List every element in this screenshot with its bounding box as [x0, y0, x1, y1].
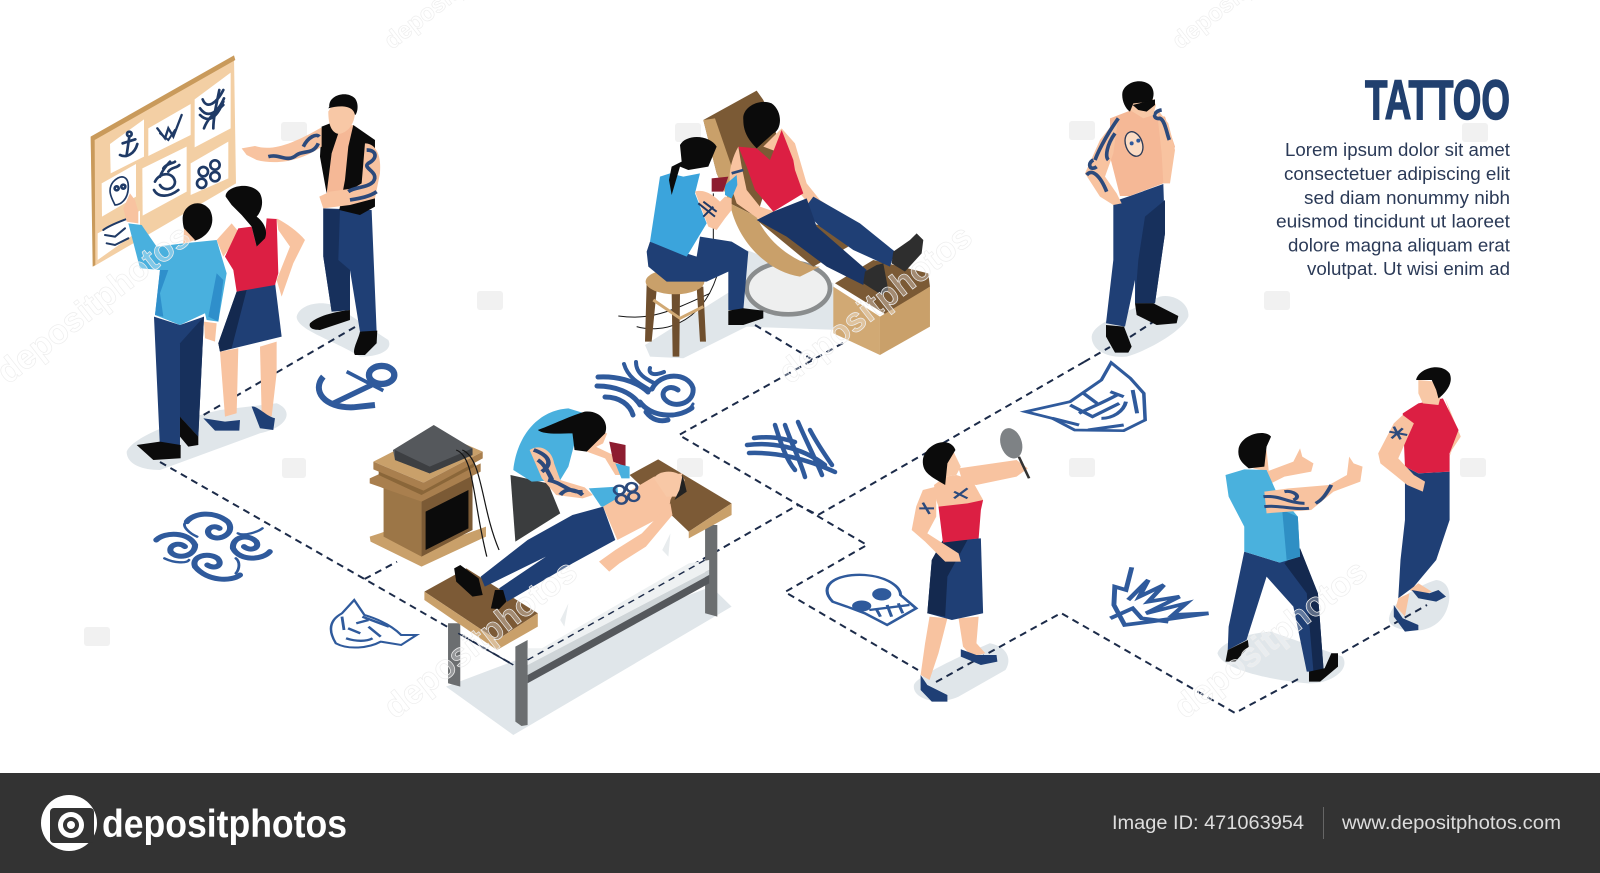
- description text: sed diam nonummy nibh: [1304, 188, 1510, 208]
- description text: consectetuer adipiscing elit: [1284, 164, 1510, 184]
- footer logo wordmark: depositphotos: [102, 803, 347, 846]
- tattoo artist on stool: [618, 137, 763, 357]
- description text: Lorem ipsum dolor sit amet: [1285, 140, 1510, 160]
- foot box: [833, 260, 930, 355]
- man in vest: [242, 94, 380, 355]
- footer band: [0, 773, 1600, 873]
- icon: skull: [827, 575, 916, 625]
- woman with hand mirror: [912, 427, 1029, 702]
- icon: crossed tribal lines: [747, 422, 835, 477]
- watermark marks: depositphotos: [772, 217, 979, 391]
- description text: dolore magna aliquam erat: [1288, 236, 1510, 256]
- group: chest tattoo on the table: [156, 408, 732, 726]
- footer logo icon: [41, 795, 97, 851]
- equipment cabinet: [370, 425, 499, 567]
- icon: four swirls: [156, 514, 270, 579]
- icon: feather swirl: [597, 362, 693, 421]
- title: TATTOO: [1365, 68, 1510, 131]
- description text: volutpat. Ut wisi enim ad: [1307, 259, 1510, 279]
- description text: [1276, 140, 1510, 279]
- seated client: [730, 102, 923, 295]
- dashed path connectors: [160, 322, 1427, 713]
- client lying down: [454, 472, 687, 609]
- group: choosing a design at the board: [91, 55, 394, 460]
- man in blue shirt pointing: [123, 193, 227, 460]
- man with sunglasses and chest skull: [1085, 81, 1178, 353]
- group: tattoo on the arm in a reclining chair: [618, 91, 930, 357]
- watermark marks: [0, 0, 1374, 726]
- table dashes over sheet: [458, 560, 705, 665]
- icon: lightning tribal: [1110, 567, 1209, 625]
- icon: wolf head: [1026, 363, 1145, 431]
- woman in red looking at board: [203, 186, 305, 431]
- floor shadows: [127, 250, 1449, 735]
- watermark marks: depositphotos: [377, 552, 584, 726]
- watermark camera marks: [84, 121, 1488, 646]
- massage table: [424, 459, 732, 726]
- artist bending over client: [510, 408, 630, 542]
- tattoo chair: [703, 91, 848, 314]
- design board: [91, 55, 236, 267]
- icon: wolf head small: [331, 600, 417, 648]
- man giving thumbs up: [1226, 433, 1363, 682]
- image id: Image ID: 471063954: [1112, 813, 1304, 834]
- group: client admiring with a mirror: [827, 363, 1461, 702]
- website: www.depositphotos.com: [1341, 813, 1561, 834]
- woman in red approving: [1378, 367, 1461, 632]
- description text: euismod tincidunt ut laoreet: [1276, 212, 1510, 232]
- watermark marks: depositphotos: [1167, 552, 1374, 726]
- icon: anchor: [319, 366, 394, 407]
